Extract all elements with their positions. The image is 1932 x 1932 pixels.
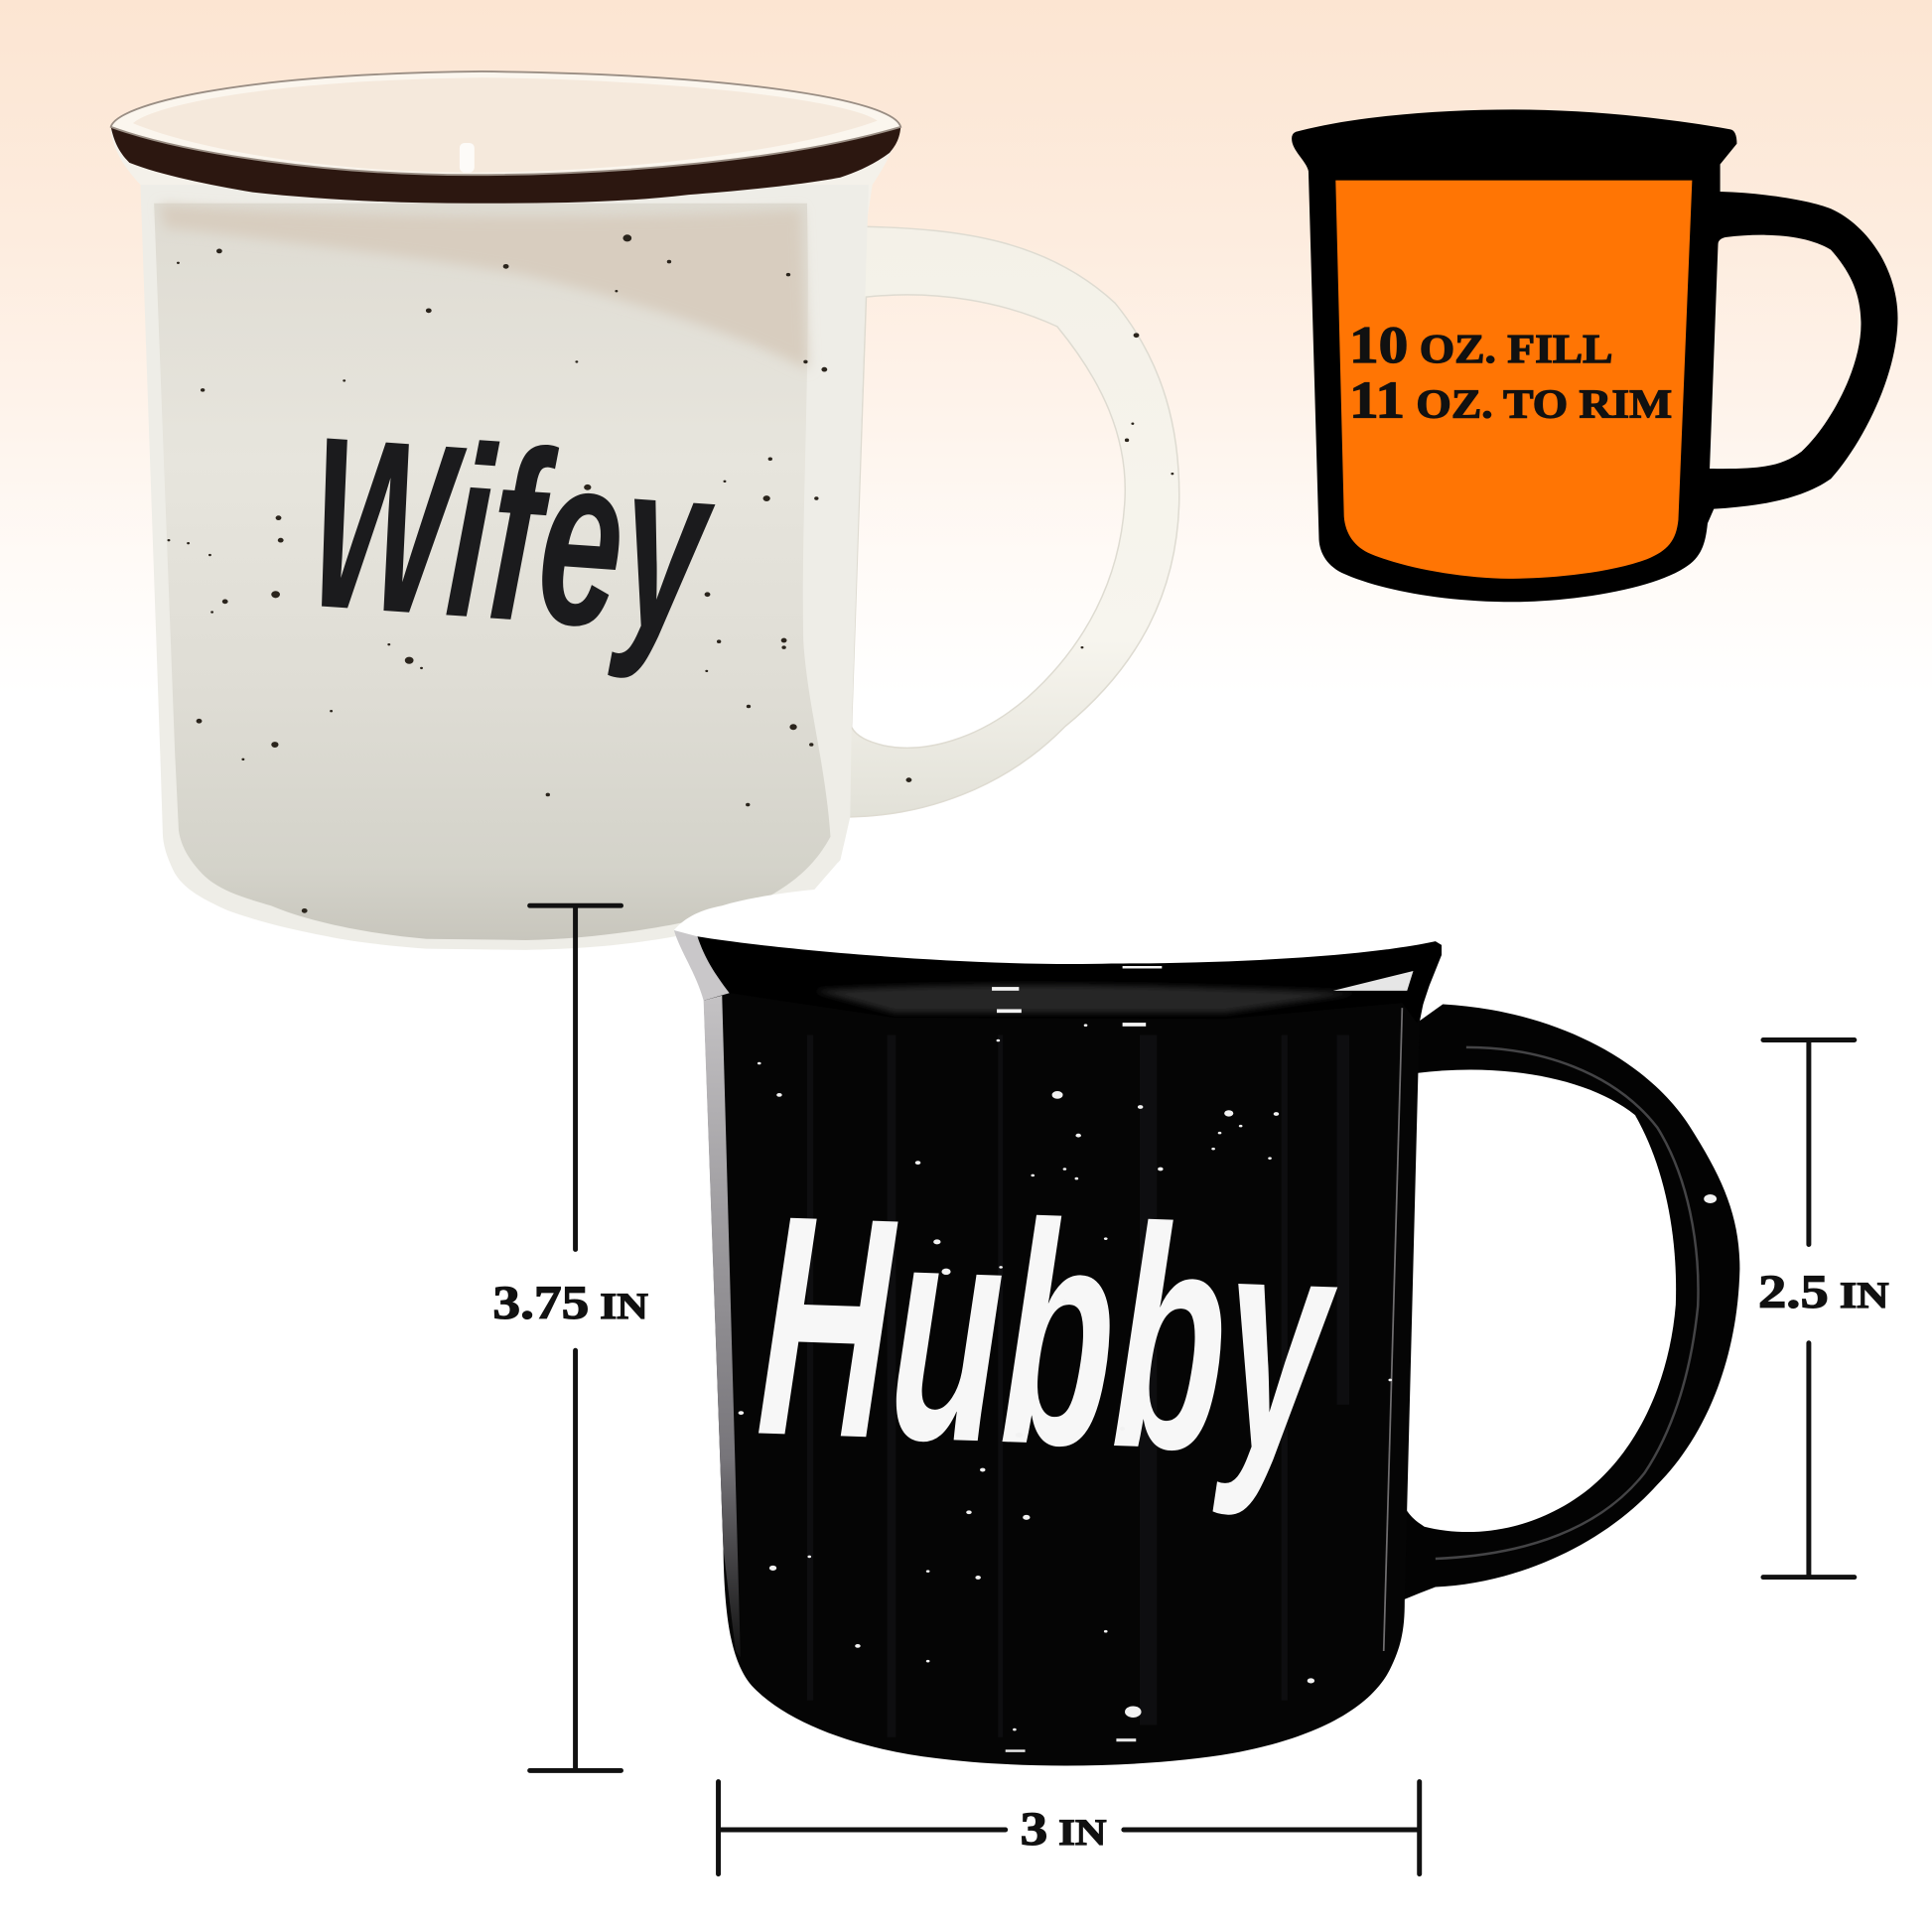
shadow band on wifey mug xyxy=(160,205,808,369)
mug silhouette xyxy=(1292,109,1897,602)
capacity text line 1: 10 OZ. FILL xyxy=(1349,315,1613,374)
inner bowl highlight xyxy=(460,143,475,173)
hubby mug handle xyxy=(1399,1004,1739,1601)
bracket lines xyxy=(530,905,621,1770)
label: 2.5 IN xyxy=(1758,1267,1889,1318)
hubby mug inside white crescent xyxy=(674,863,1445,973)
bracket lines xyxy=(1763,1039,1855,1578)
rim flare left xyxy=(674,930,730,1001)
wifey mug rim band xyxy=(111,127,900,204)
bracket lines xyxy=(719,1782,1420,1874)
label: 3 IN xyxy=(1021,1804,1107,1856)
bottom glints xyxy=(1006,1738,1136,1752)
wifey mug handle xyxy=(826,226,1179,817)
neck sheen xyxy=(814,985,1355,1013)
handle hole xyxy=(1397,1069,1676,1532)
hubby label text: Hubby xyxy=(753,1151,1344,1522)
wifey label text: Wifey xyxy=(301,386,722,686)
hubby mug body xyxy=(704,973,1430,1765)
handle gloss line xyxy=(1436,1047,1699,1559)
wifey mug lip xyxy=(111,127,900,234)
wifey mug speckles xyxy=(168,234,1173,913)
left glossy edge xyxy=(704,996,741,1657)
capacity mug icon xyxy=(1292,109,1897,602)
wifey mug xyxy=(111,71,1179,950)
wifey mug inner bowl xyxy=(133,77,878,173)
right glossy edge xyxy=(1384,1008,1402,1651)
dimension: handle height 2.5 in xyxy=(1758,1039,1889,1578)
wifey mug rim top xyxy=(111,71,900,175)
hubby mug speckles xyxy=(739,1024,1717,1730)
capacity text line 2: 11 OZ. TO RIM xyxy=(1349,370,1672,430)
hubby mug xyxy=(674,863,1739,1765)
rim highlights xyxy=(992,966,1162,1027)
hubby mug rim band xyxy=(697,936,1442,1023)
dimension: height 3.75 in xyxy=(492,905,648,1770)
notch highlight xyxy=(1333,971,1414,991)
dimension: width 3 in xyxy=(719,1782,1420,1874)
orange fill area xyxy=(1335,181,1692,579)
label: 3.75 IN xyxy=(492,1278,648,1329)
wifey mug body outer xyxy=(140,185,869,950)
wifey mug body core xyxy=(154,204,830,940)
vertical body streaks xyxy=(807,1035,1349,1737)
